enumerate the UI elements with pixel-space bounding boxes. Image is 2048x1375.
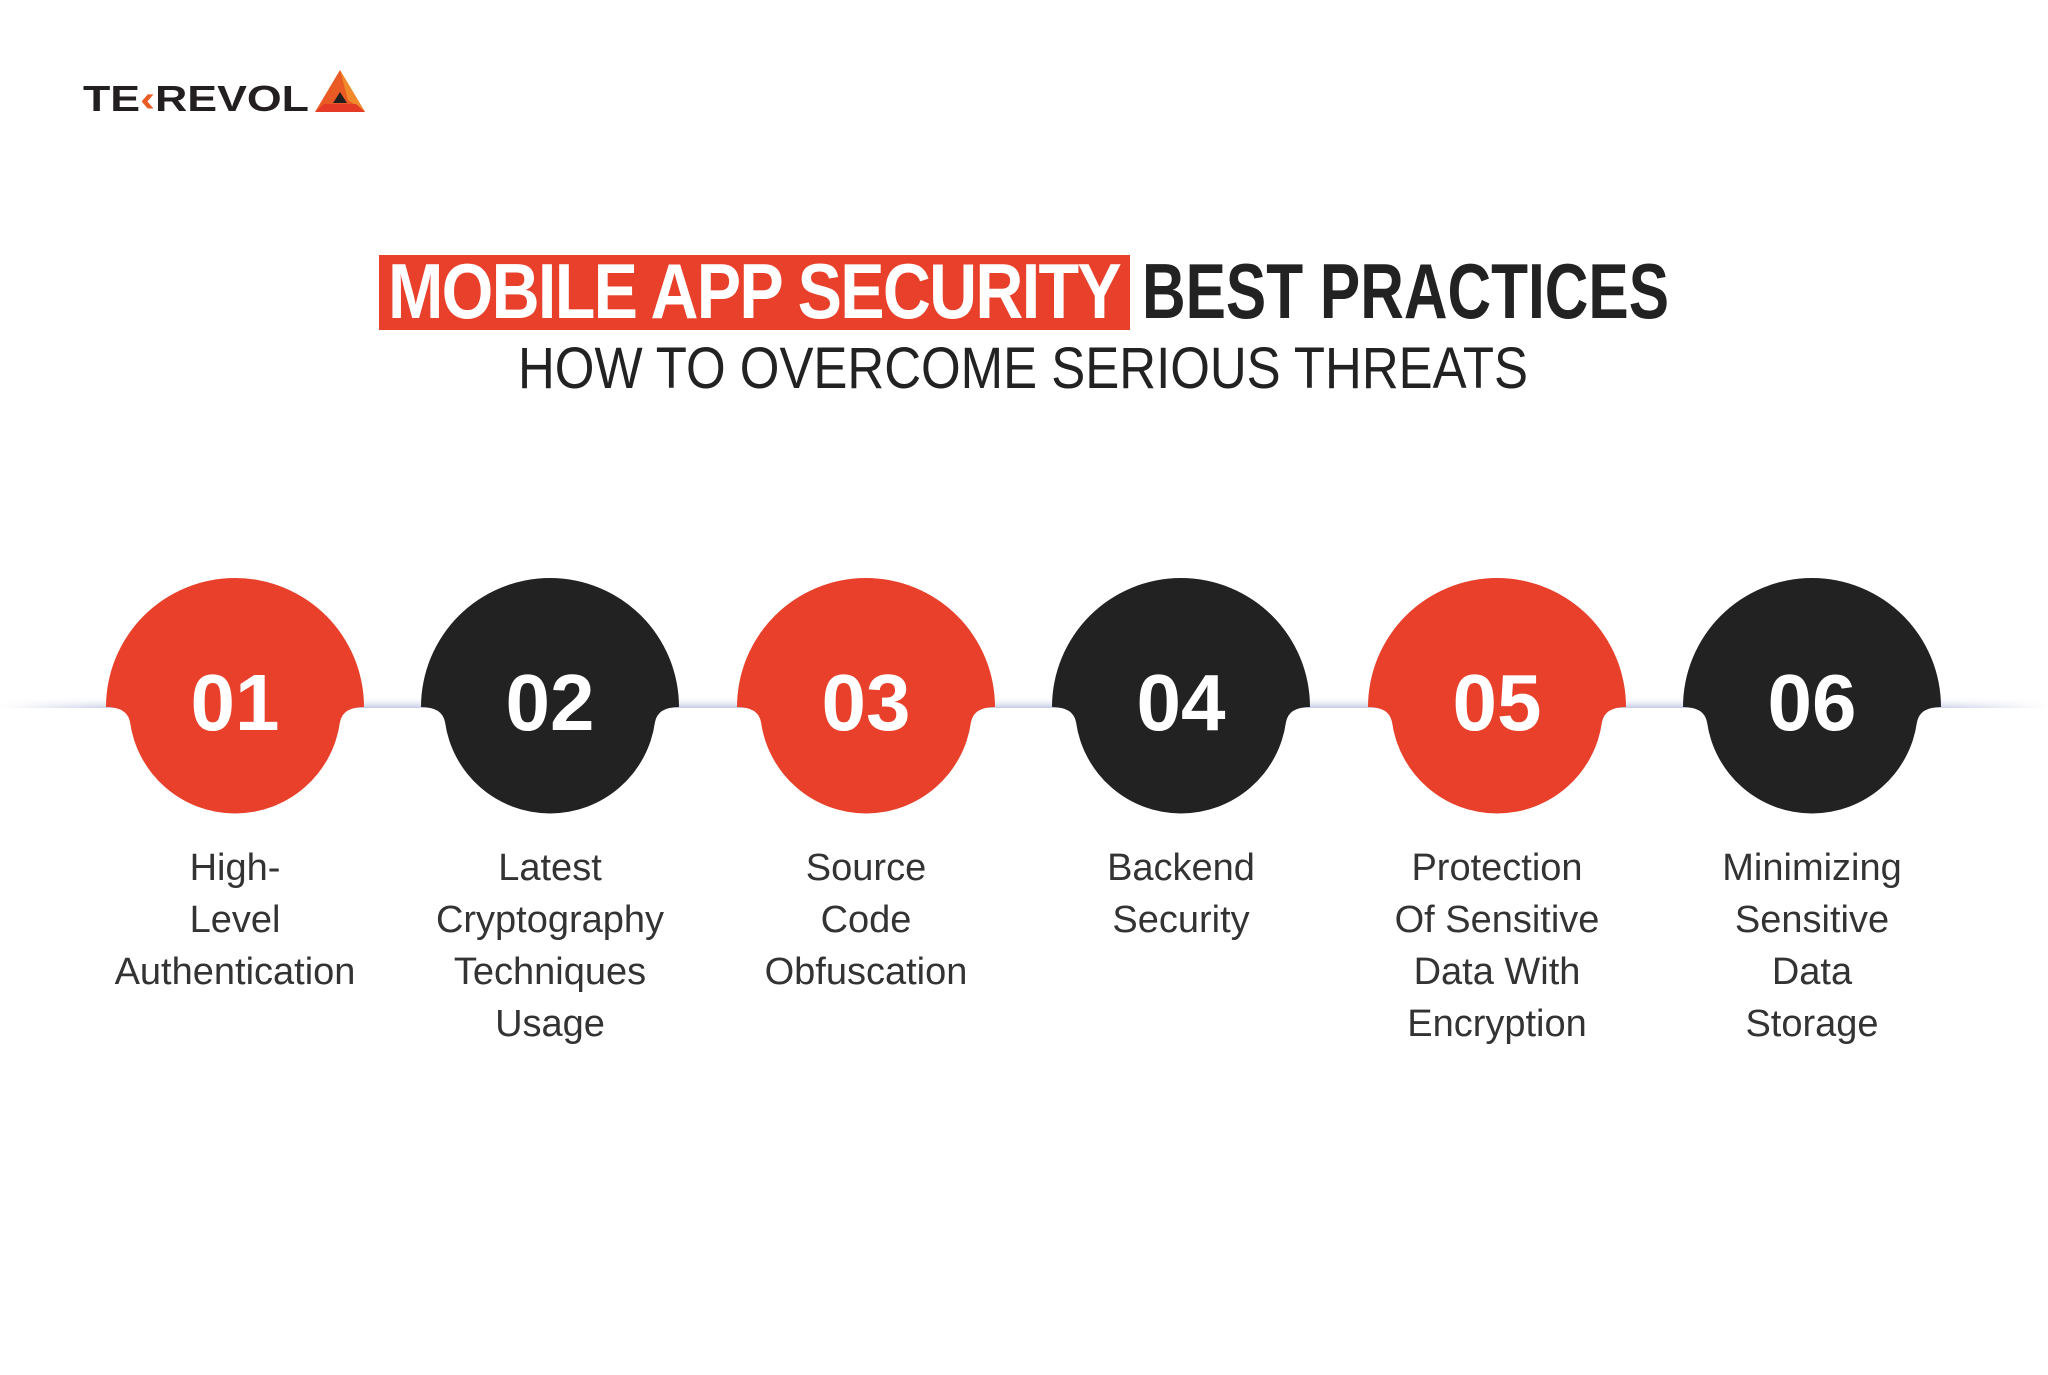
step 02: Usage (495, 1003, 605, 1045)
step 01 (106, 578, 364, 993)
step 05: Encryption (1407, 1003, 1587, 1045)
step 03: Code (821, 899, 911, 941)
step 05: Data With (1414, 951, 1580, 993)
step 06: 06 (1768, 658, 1856, 747)
subtitle: HOW TO OVERCOME SERIOUS THREATS (518, 336, 1528, 401)
step 06: Minimizing (1722, 847, 1902, 889)
step 01: 01 (191, 658, 279, 747)
timeline line (0, 694, 2048, 710)
step 05: Protection (1411, 847, 1583, 889)
step 02: Cryptography (436, 899, 664, 941)
step 04: Security (1112, 899, 1250, 941)
logo: TE ‹REVOL (83, 78, 309, 119)
step 01: Level (190, 899, 280, 941)
step 03: 03 (822, 658, 910, 747)
step 03: Obfuscation (765, 951, 967, 993)
step 04: 04 (1137, 658, 1226, 747)
step 03 (737, 578, 995, 993)
step 01: Authentication (115, 951, 355, 993)
step 01: High- (190, 847, 280, 889)
step 02: 02 (506, 658, 594, 747)
step 05: 05 (1453, 658, 1541, 747)
step 04 (1052, 578, 1310, 941)
step 04: Backend (1107, 847, 1255, 889)
title (379, 247, 1669, 335)
logo (83, 70, 365, 119)
step 03: Source (806, 847, 926, 889)
step 06: Sensitive (1735, 899, 1889, 941)
step 02: Latest (498, 847, 602, 889)
step 06 (1683, 578, 1941, 1045)
title: BEST PRACTICES (1142, 247, 1669, 335)
step 02 (421, 578, 679, 1045)
step 05: Of Sensitive (1395, 899, 1599, 941)
step 02: Techniques (454, 951, 646, 993)
step 05 (1368, 578, 1626, 1045)
title: MOBILE APP SECURITY (388, 247, 1121, 335)
step 06: Data (1772, 951, 1853, 993)
step 06: Storage (1745, 1003, 1879, 1045)
